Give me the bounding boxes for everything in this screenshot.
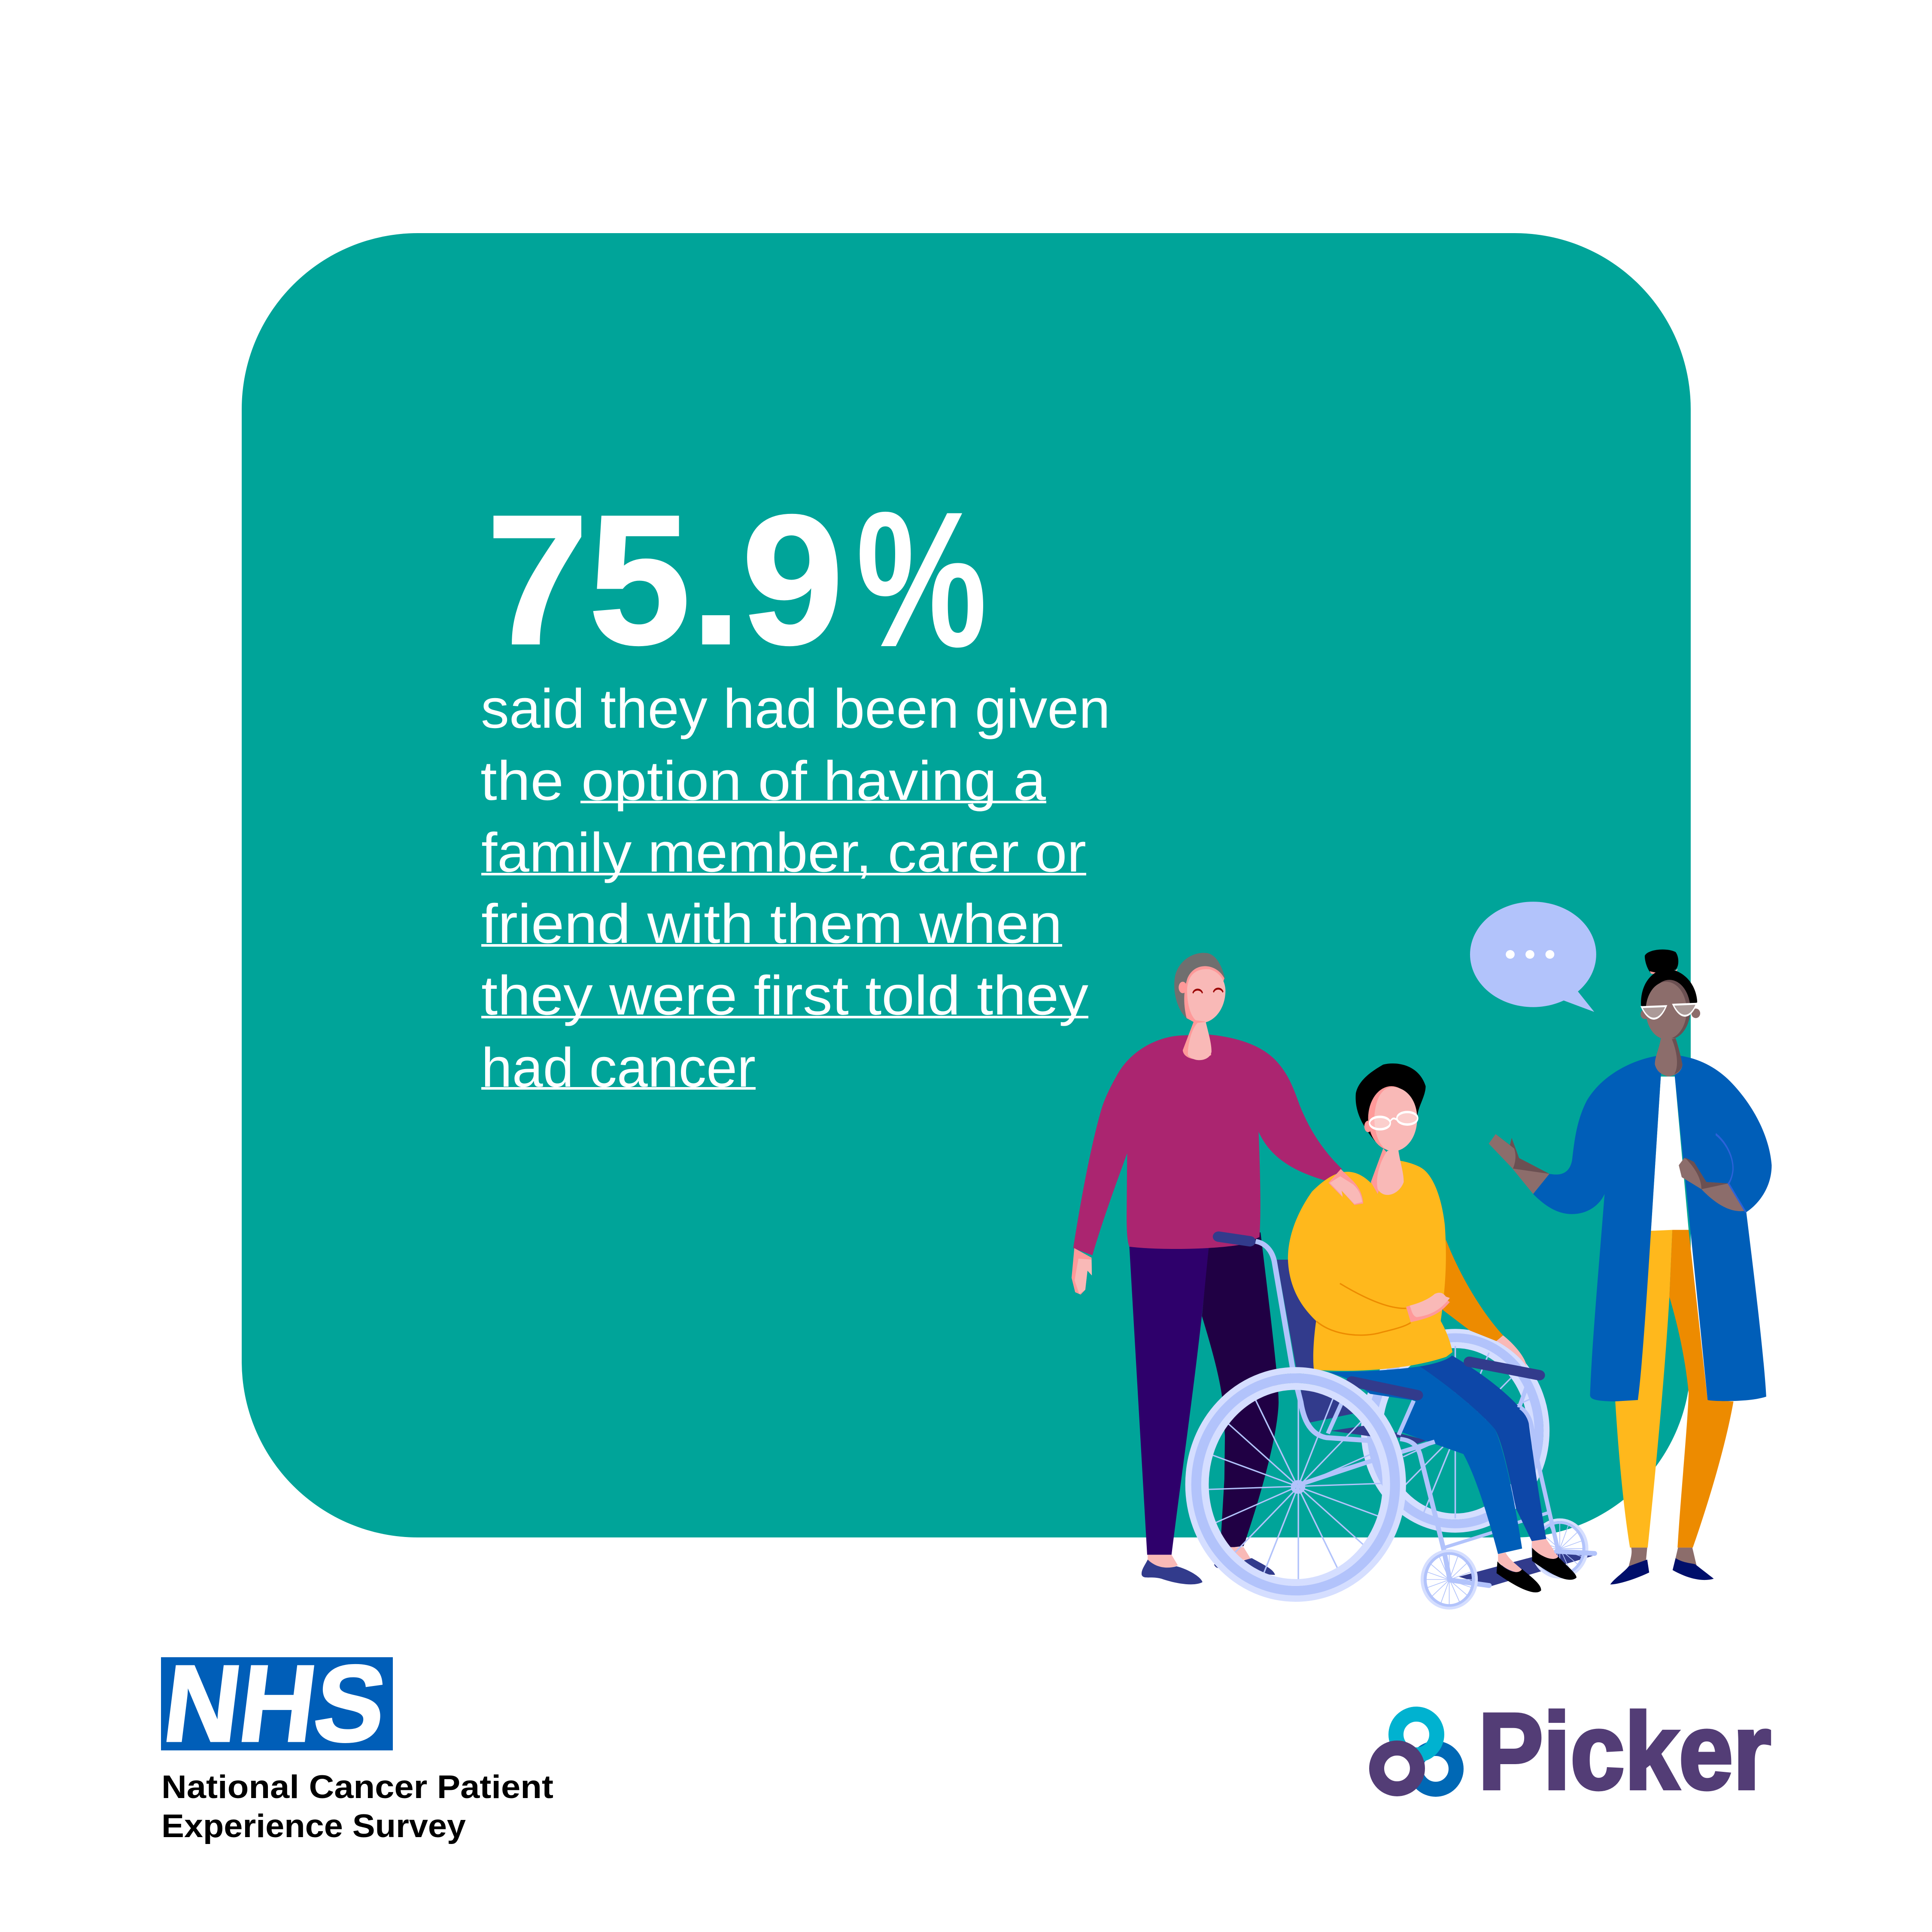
person: standing man in magenta sweater (1072, 953, 1342, 1584)
headline statistic: 75.9 (486, 477, 844, 683)
survey name: National Cancer Patient (161, 1769, 553, 1805)
person: seated woman torso and head (1288, 1063, 1452, 1371)
wheelchair: front wheel (1189, 1370, 1403, 1599)
survey name (161, 1769, 553, 1844)
person: seated woman's black shoes (1497, 1548, 1577, 1592)
wheelchair: frame, front caster and footrests (1301, 1383, 1595, 1608)
logo: NHS: NHS (158, 1643, 392, 1764)
logo: Picker wordmark: Picker (1478, 1691, 1771, 1812)
survey name: Experience Survey (161, 1808, 466, 1844)
body text: they were first told they (481, 965, 1089, 1027)
body text: the (480, 750, 564, 812)
speech bubble (1470, 902, 1596, 1012)
headline statistic (486, 472, 987, 687)
headline statistic: % (856, 472, 987, 687)
body text: family member, carer or (481, 822, 1086, 884)
wheelchair: seat back and push handle (1218, 1236, 1427, 1444)
body text: option of having a (581, 750, 1046, 812)
logo: Picker rings (1376, 1714, 1456, 1789)
wheelchair: footplate and rear caster (1444, 1513, 1593, 1586)
body text: said they had been given (481, 678, 1110, 740)
wheelchair: rear wheel (1364, 1332, 1546, 1530)
person: woman in blue coat (1489, 949, 1772, 1585)
person: seated woman's far arm (1443, 1239, 1526, 1367)
body text (480, 678, 1110, 1099)
person: seated woman's legs and arm (1316, 1283, 1558, 1572)
body text: had cancer (481, 1037, 756, 1099)
body text: friend with them when (481, 893, 1062, 955)
panel: teal background (242, 233, 1691, 1537)
